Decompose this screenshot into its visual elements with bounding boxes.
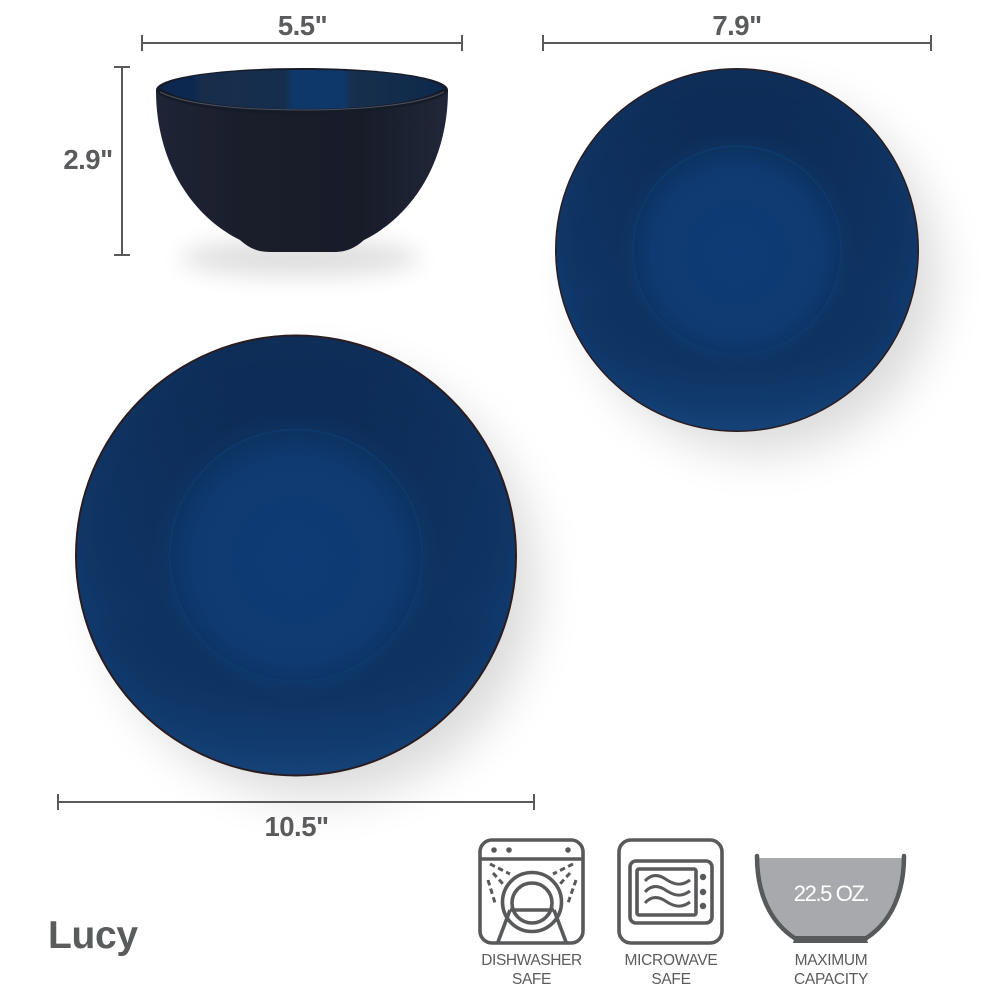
dimension: bowl height 2.9 inches: 2.9" [63, 144, 113, 175]
label: dishwasher safe: SAFE [512, 971, 551, 988]
label: microwave safe: SAFE [651, 971, 691, 988]
label: microwave safe: MICROWAVE [625, 952, 717, 969]
dimension: bowl width 5.5 inches: 5.5" [278, 10, 327, 41]
icon: microwave safe [619, 840, 722, 988]
dimension: small plate width 7.9 inches: 7.9" [712, 10, 762, 41]
bowl photo [156, 66, 448, 276]
capacity value: 22.5 OZ. [794, 881, 868, 906]
dimension: small plate width 7.9 inches [543, 10, 931, 51]
icon: maximum capacity bowl [757, 856, 904, 988]
icon: dishwasher safe [480, 840, 583, 988]
dimension: large plate width 10.5 inches: 10.5" [264, 811, 329, 842]
label: maximum capacity: CAPACITY [794, 971, 868, 988]
dimension: bowl height 2.9 inches [63, 67, 130, 255]
small salad plate [555, 68, 938, 453]
large dinner plate [75, 334, 536, 798]
dimension: bowl width 5.5 inches [142, 10, 462, 51]
product name: Lucy: Lucy [48, 914, 138, 957]
label: dishwasher safe: DISHWASHER [481, 952, 582, 969]
label: maximum capacity: MAXIMUM [795, 952, 867, 969]
dimension: large plate width 10.5 inches [58, 794, 534, 842]
